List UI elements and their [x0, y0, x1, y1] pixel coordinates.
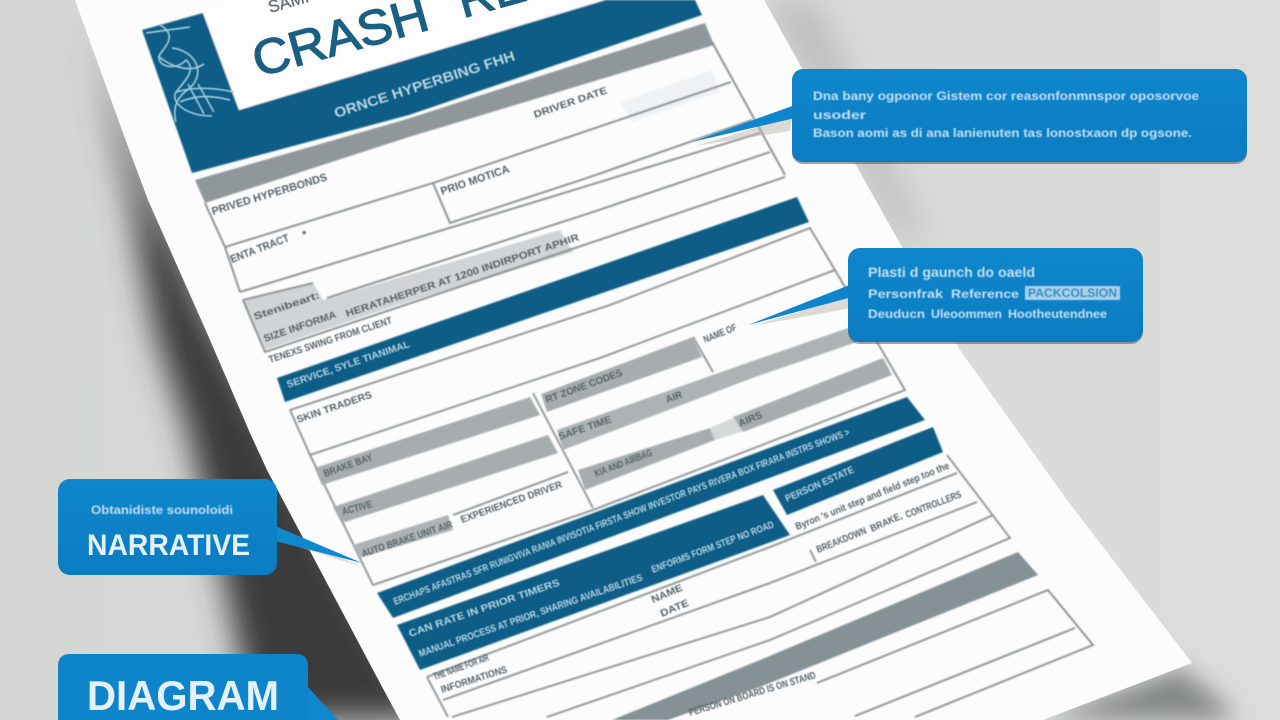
form text labels: NAME OF	[702, 322, 739, 346]
form text labels: DATE	[659, 598, 691, 620]
form text labels: PERSON ON BOARD IS ON STAND	[688, 670, 817, 719]
form text labels: *	[302, 229, 307, 241]
form text labels: AIR	[664, 389, 685, 406]
form text labels: ENFORMS FORM STEP NO ROAD	[650, 520, 776, 576]
form text labels: NAME	[650, 583, 685, 606]
title	[247, 0, 662, 88]
grey field bars	[315, 328, 892, 558]
callout text: Deuducn	[868, 307, 925, 321]
callout text: Personfrak	[868, 287, 943, 301]
callout text: usoder	[813, 108, 866, 122]
callout text: DIAGRAM	[87, 672, 279, 719]
callout text: Bason aomi as di ana lanienuten tas lonostxaon dp ogsone.	[813, 126, 1192, 140]
callout text: Dna bany ogponor Gistem cor reasonfonmnspor oposorvoe	[813, 89, 1199, 103]
form lines: vehicle section	[205, 42, 785, 352]
callout: narrative	[58, 479, 362, 575]
callout text: Reference	[951, 287, 1019, 301]
form text labels: ERCHAPS AFASTRAS SFR RUNIGVIVA RANIA INVISOTIA FIRSTA SHOW INVESTOR PAYS RIVERA BOX FIRARA INSTRS SHOWS >	[392, 427, 851, 608]
form text labels: AIRS	[737, 410, 764, 430]
form text labels: RT ZONE CODES	[544, 368, 624, 406]
callout: diagram	[58, 654, 338, 720]
form text labels: SKIN TRADERS	[295, 390, 374, 426]
callout: top right note	[692, 69, 1247, 164]
form text labels: PRIVED HYPERBONDS	[210, 172, 329, 218]
bottom grey bar	[612, 552, 1038, 720]
form text labels: AUTO BRAKE UNIT AIR	[360, 519, 455, 560]
form text labels: BRAKE,	[869, 511, 904, 535]
callout text	[813, 89, 1199, 140]
section bars	[195, 23, 809, 402]
form text labels: CONTROLLERS	[904, 489, 963, 521]
form text labels: TENEXS SWING FROM CLIENT	[268, 316, 394, 366]
signature section lines	[427, 455, 1010, 717]
form text labels	[210, 48, 963, 719]
form text labels: SERVICE, SYLE TIANIMAL	[285, 339, 411, 391]
form text labels: PRIO MOTICA	[439, 163, 511, 198]
callout text: Uleoommen	[931, 307, 1002, 321]
callout text	[868, 264, 1120, 321]
panel: report form	[142, 0, 1093, 720]
form text labels: ACTIVE	[341, 499, 374, 518]
form lines: lower grid	[290, 228, 905, 585]
callout text: Plasti d gaunch do oaeld	[868, 264, 1035, 280]
bottom box lines	[817, 590, 1093, 717]
form text labels: SAFE TIME	[557, 414, 613, 443]
form text labels: Stenibeart:	[252, 290, 321, 323]
form text labels: Byron 's unit step and field step too the	[794, 461, 951, 533]
callout text: Hootheutendnee	[1008, 307, 1107, 321]
callout text	[87, 503, 250, 562]
form text labels: EXPERIENCED DRIVER	[459, 479, 565, 526]
callout text: NARRATIVE	[87, 529, 250, 562]
blue section bars	[377, 397, 943, 670]
form text labels: HERATAHERPER AT 1200 INDIRPORT APHIR	[344, 232, 581, 320]
callout text: PACKCOLSION	[1028, 286, 1117, 300]
form text labels: INFORMATIONS	[440, 664, 509, 696]
form text labels: KIA AND AIRBAG	[593, 448, 654, 480]
callout: middle right note	[748, 248, 1143, 344]
form text labels: MANUAL PROCESS AT PRIOR, SHARING AVAILABILITIES	[417, 573, 644, 660]
form text labels: PERSON ESTATE	[784, 465, 856, 505]
form text labels: ORNCE HYPERBING FHH	[332, 48, 517, 121]
icon: logo sketch	[146, 25, 234, 122]
form text labels: ENTA TRACT	[229, 232, 291, 266]
form text labels: SIZE INFORMA	[262, 310, 338, 345]
callout text: Obtanidiste sounoloidi	[91, 503, 233, 517]
form text labels: CAN RATE IN PRIOR TIMERS	[407, 578, 562, 640]
form text labels: BRAKE BAY	[322, 452, 374, 480]
form text labels: THE NAME FOR AIR	[432, 652, 491, 683]
header band	[142, 0, 702, 173]
form text labels: DRIVER DATE	[532, 85, 609, 121]
form text labels: BREAKDOWN	[815, 526, 868, 556]
